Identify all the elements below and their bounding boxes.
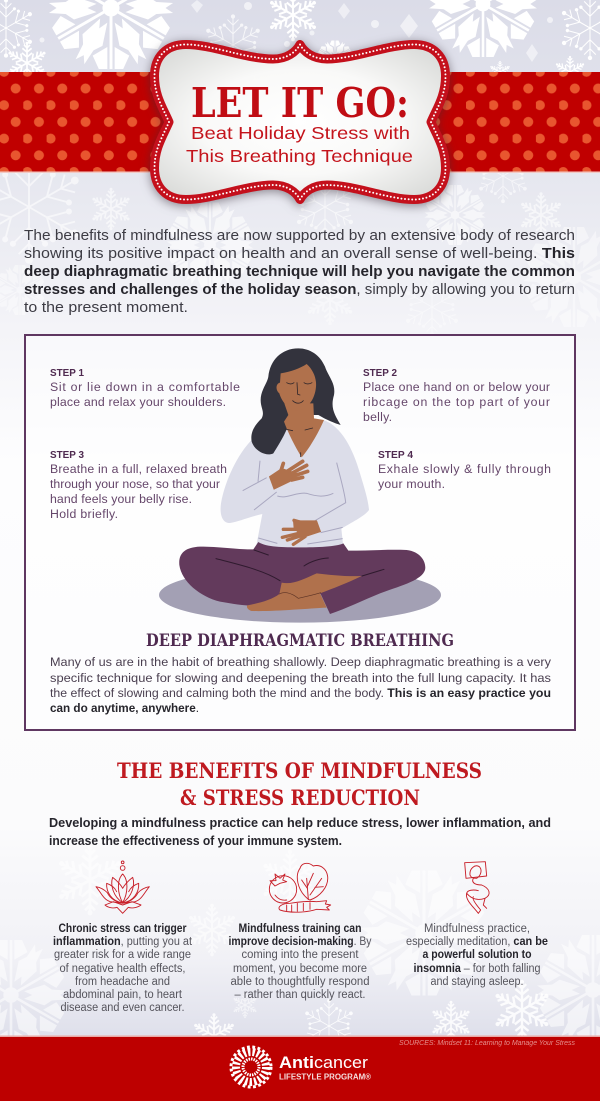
benefit column 2: improve decision-making. By xyxy=(228,936,372,948)
step 1 xyxy=(50,367,240,409)
intro paragraph: to the present moment. xyxy=(24,300,188,316)
logo tagline: LIFESTYLE PROGRAM® xyxy=(279,1072,371,1082)
neck and chest xyxy=(284,403,324,457)
trouser fold lines xyxy=(216,550,384,598)
icon: sleeping figure xyxy=(465,862,489,913)
intro paragraph xyxy=(24,228,575,316)
intro paragraph: The benefits of mindfulness are now supported by an extensive body of research xyxy=(24,228,575,244)
trousers xyxy=(179,542,425,614)
intro paragraph: stresses and challenges of the holiday season , simply by allowing you to return xyxy=(24,282,575,298)
facial features xyxy=(285,383,313,457)
logo sunburst xyxy=(231,1047,271,1087)
step 2: STEP 2 xyxy=(363,367,397,379)
logo wordmark: Anticancer xyxy=(279,1053,368,1072)
benefit column 2: able to thoughtfully respond xyxy=(230,976,370,988)
sweater xyxy=(221,420,369,547)
benefit column 2: moment, you become more xyxy=(233,963,367,975)
panel border xyxy=(25,335,575,730)
subtitle line 1: Beat Holiday Stress with xyxy=(191,123,410,143)
lower hand xyxy=(282,520,321,544)
benefit column 1: inflammation, putting you at xyxy=(53,936,193,948)
benefit column 3 xyxy=(406,923,548,988)
step 4: Exhale slowly & fully through xyxy=(378,462,551,476)
benefit column 3: Mindfulness practice, xyxy=(424,923,530,935)
panel: deep diaphragmatic breathing xyxy=(25,335,575,730)
floor shadow xyxy=(159,567,441,623)
subtitle line 2: This Breathing Technique xyxy=(186,146,413,166)
step 3 xyxy=(50,449,227,521)
step 1: Sit or lie down in a comfortable xyxy=(50,380,240,394)
panel heading: DEEP DIAPHRAGMATIC BREATHING xyxy=(146,631,454,650)
face xyxy=(277,364,316,411)
section intro: Developing a mindfulness practice can help reduce stress, lower inflammation, and xyxy=(49,815,551,830)
upper hand xyxy=(269,461,308,489)
icon: lotus xyxy=(96,861,149,913)
panel paragraph: the effect of slowing and calming both the mind and the body. This is an easy practice you xyxy=(50,686,551,700)
benefit column 1 xyxy=(53,923,193,1014)
step 1: STEP 1 xyxy=(50,367,84,379)
step 2: ribcage on the top part of your xyxy=(363,395,550,409)
step 1: place and relax your shoulders. xyxy=(50,395,226,409)
step 2 xyxy=(363,367,550,424)
benefit column 3: especially meditation, can be xyxy=(406,936,548,948)
intro paragraph: showing its positive impact on health and an overall sense of well-being. This xyxy=(24,246,575,262)
sources: SOURCES: Mindset 11: Learning to Manage Your Stress xyxy=(399,1038,575,1047)
panel paragraph xyxy=(50,655,552,715)
section title: benefits of mindfulness: THE BENEFITS OF MINDFULNESS xyxy=(117,758,482,783)
step 4: your mouth. xyxy=(378,477,445,491)
crossed feet xyxy=(247,573,362,611)
benefit column 1: disease and even cancer. xyxy=(60,1002,184,1014)
panel paragraph: specific technique for slowing and deepening the breath into the full lung capacity. It has xyxy=(50,671,551,685)
benefit column 1: abdominal pain, to heart xyxy=(63,989,183,1001)
illustration: seated woman breathing xyxy=(159,348,441,623)
icon: vegetables xyxy=(269,863,331,912)
section intro xyxy=(49,815,551,848)
benefit column 2 xyxy=(228,923,372,1001)
sweater folds xyxy=(243,461,346,544)
section title: benefits of mindfulness xyxy=(117,758,482,810)
step 2: Place one hand on or below your xyxy=(363,380,550,394)
benefit column 1: of negative health effects, xyxy=(60,963,186,975)
benefit column 2: – rather than quickly react. xyxy=(234,989,366,1001)
benefit column 3: a powerful solution to xyxy=(422,949,532,961)
intro paragraph: deep diaphragmatic breathing technique will help you navigate the common xyxy=(24,264,575,280)
step 2: belly. xyxy=(363,410,392,424)
step 4: STEP 4 xyxy=(378,449,413,461)
section title: benefits of mindfulness: & STRESS REDUCTION xyxy=(180,785,420,810)
step 4 xyxy=(378,449,551,491)
benefit column 1: greater risk for a wide range xyxy=(54,949,191,961)
plaque frame xyxy=(154,44,446,200)
step 3: hand feels your belly rise. xyxy=(50,492,192,506)
step 3: Hold briefly. xyxy=(50,507,118,521)
red polka dot ribbon xyxy=(0,72,600,173)
step 3: through your nose, so that your xyxy=(50,477,220,491)
panel paragraph: Many of us are in the habit of breathing shallowly. Deep diaphragmatic breathing is a very xyxy=(50,655,552,669)
footer band xyxy=(0,1036,600,1101)
hair xyxy=(251,348,341,454)
benefit column 2: coming into the present xyxy=(242,949,359,961)
section intro: increase the effectiveness of your immune system. xyxy=(49,833,342,848)
panel paragraph: can do anytime, anywhere. xyxy=(50,701,199,715)
benefit column 2: Mindfulness training can xyxy=(238,923,362,935)
title plaque xyxy=(154,44,446,200)
step 3: Breathe in a full, relaxed breath xyxy=(50,462,227,476)
benefit column 1: Chronic stress can trigger xyxy=(58,923,187,935)
benefit column 3: insomnia – for both falling xyxy=(414,963,540,975)
title: let it go: LET IT GO: xyxy=(191,79,409,127)
step 3: STEP 3 xyxy=(50,449,84,461)
benefit column 3: and staying asleep. xyxy=(430,976,524,988)
benefit column 1: from headache and xyxy=(75,976,170,988)
